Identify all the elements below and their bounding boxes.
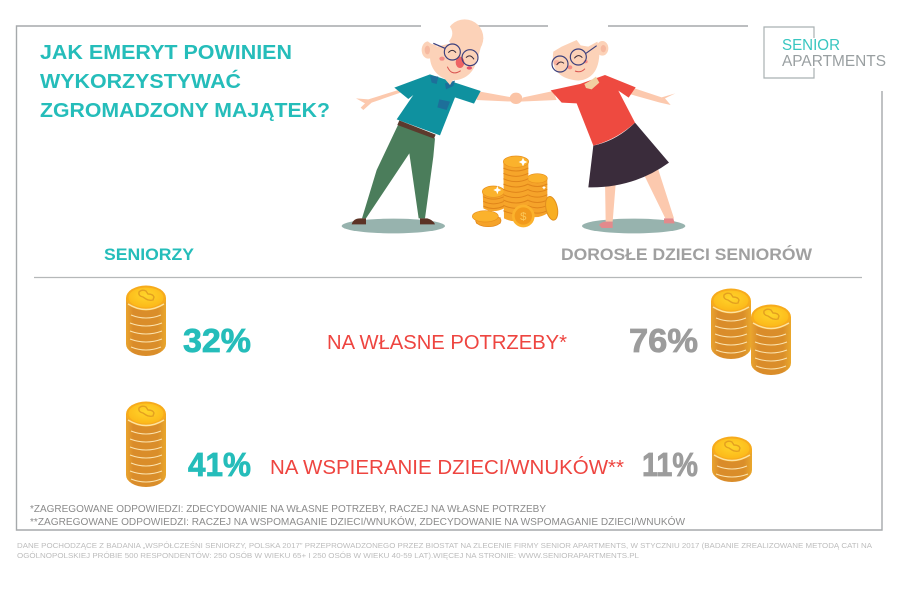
value: children own needs: 76% <box>629 322 698 359</box>
column heading: adult children: DOROSŁE DZIECI SENIORÓW <box>561 245 813 264</box>
coin pile <box>472 156 560 227</box>
footnotes: **ZAGREGOWANE ODPOWIEDZI: RACZEJ NA WSPOMAGANIE DZIECI/WNUKÓW, ZDECYDOWANIE NA WSPOMAGANIE DZIECI/WNUKÓW <box>30 515 685 528</box>
value: seniors supporting family: 41% <box>188 446 251 483</box>
coin pile: $ <box>520 211 527 223</box>
title: JAK EMERYT POWINIEN <box>40 42 292 64</box>
man <box>352 19 513 224</box>
coin stack: 32% <box>126 286 166 356</box>
footnotes <box>30 503 685 528</box>
column heading: seniors: SENIORZY <box>104 245 195 264</box>
label: own needs: NA WŁASNE POTRZEBY* <box>327 332 567 354</box>
value: children supporting family: 11% <box>642 446 698 483</box>
logo: SENIOR <box>782 37 840 54</box>
coin stack: 11% <box>712 436 752 482</box>
illustration: seniors and coins <box>342 19 685 233</box>
source note <box>17 541 873 560</box>
logo: APARTMENTS <box>782 53 886 70</box>
shadows <box>342 219 685 233</box>
label: supporting children and grandchildren: NA WSPIERANIE DZIECI/WNUKÓW** <box>270 456 624 479</box>
woman <box>510 40 675 228</box>
divider <box>34 276 862 278</box>
coin stacks: 76% <box>711 288 791 375</box>
title <box>40 42 330 122</box>
coin stack: 41% <box>126 402 166 487</box>
footnotes: *ZAGREGOWANE ODPOWIEDZI: ZDECYDOWANIE NA WŁASNE POTRZEBY, RACZEJ NA WŁASNE POTRZEBY <box>30 503 546 515</box>
source note: OGÓLNOPOLSKIEJ PRÓBIE 500 RESPONDENTÓW: 250 OSÓB W WIEKU 65+ I 250 OSÓB W WIEKU 40-59 LAT).WIĘCEJ NA STRONIE: WWW.SENIORAPARTMENTS.PL <box>17 551 639 560</box>
title: WYKORZYSTYWAĆ <box>40 69 241 93</box>
value: seniors own needs: 32% <box>183 322 251 359</box>
source note: DANE POCHODZĄCE Z BADANIA „WSPÓŁCZEŚNI SENIORZY, POLSKA 2017” PRZEPROWADZONEGO PRZEZ BIOSTAT NA ZLECENIE FIRMY SENIOR APARTMENTS, W STYCZNIU 2017 (BADANIE ZREALIZOWANE METODĄ CATI NA <box>17 541 873 550</box>
logo <box>764 27 886 78</box>
title: ZGROMADZONY MAJĄTEK? <box>40 100 330 122</box>
